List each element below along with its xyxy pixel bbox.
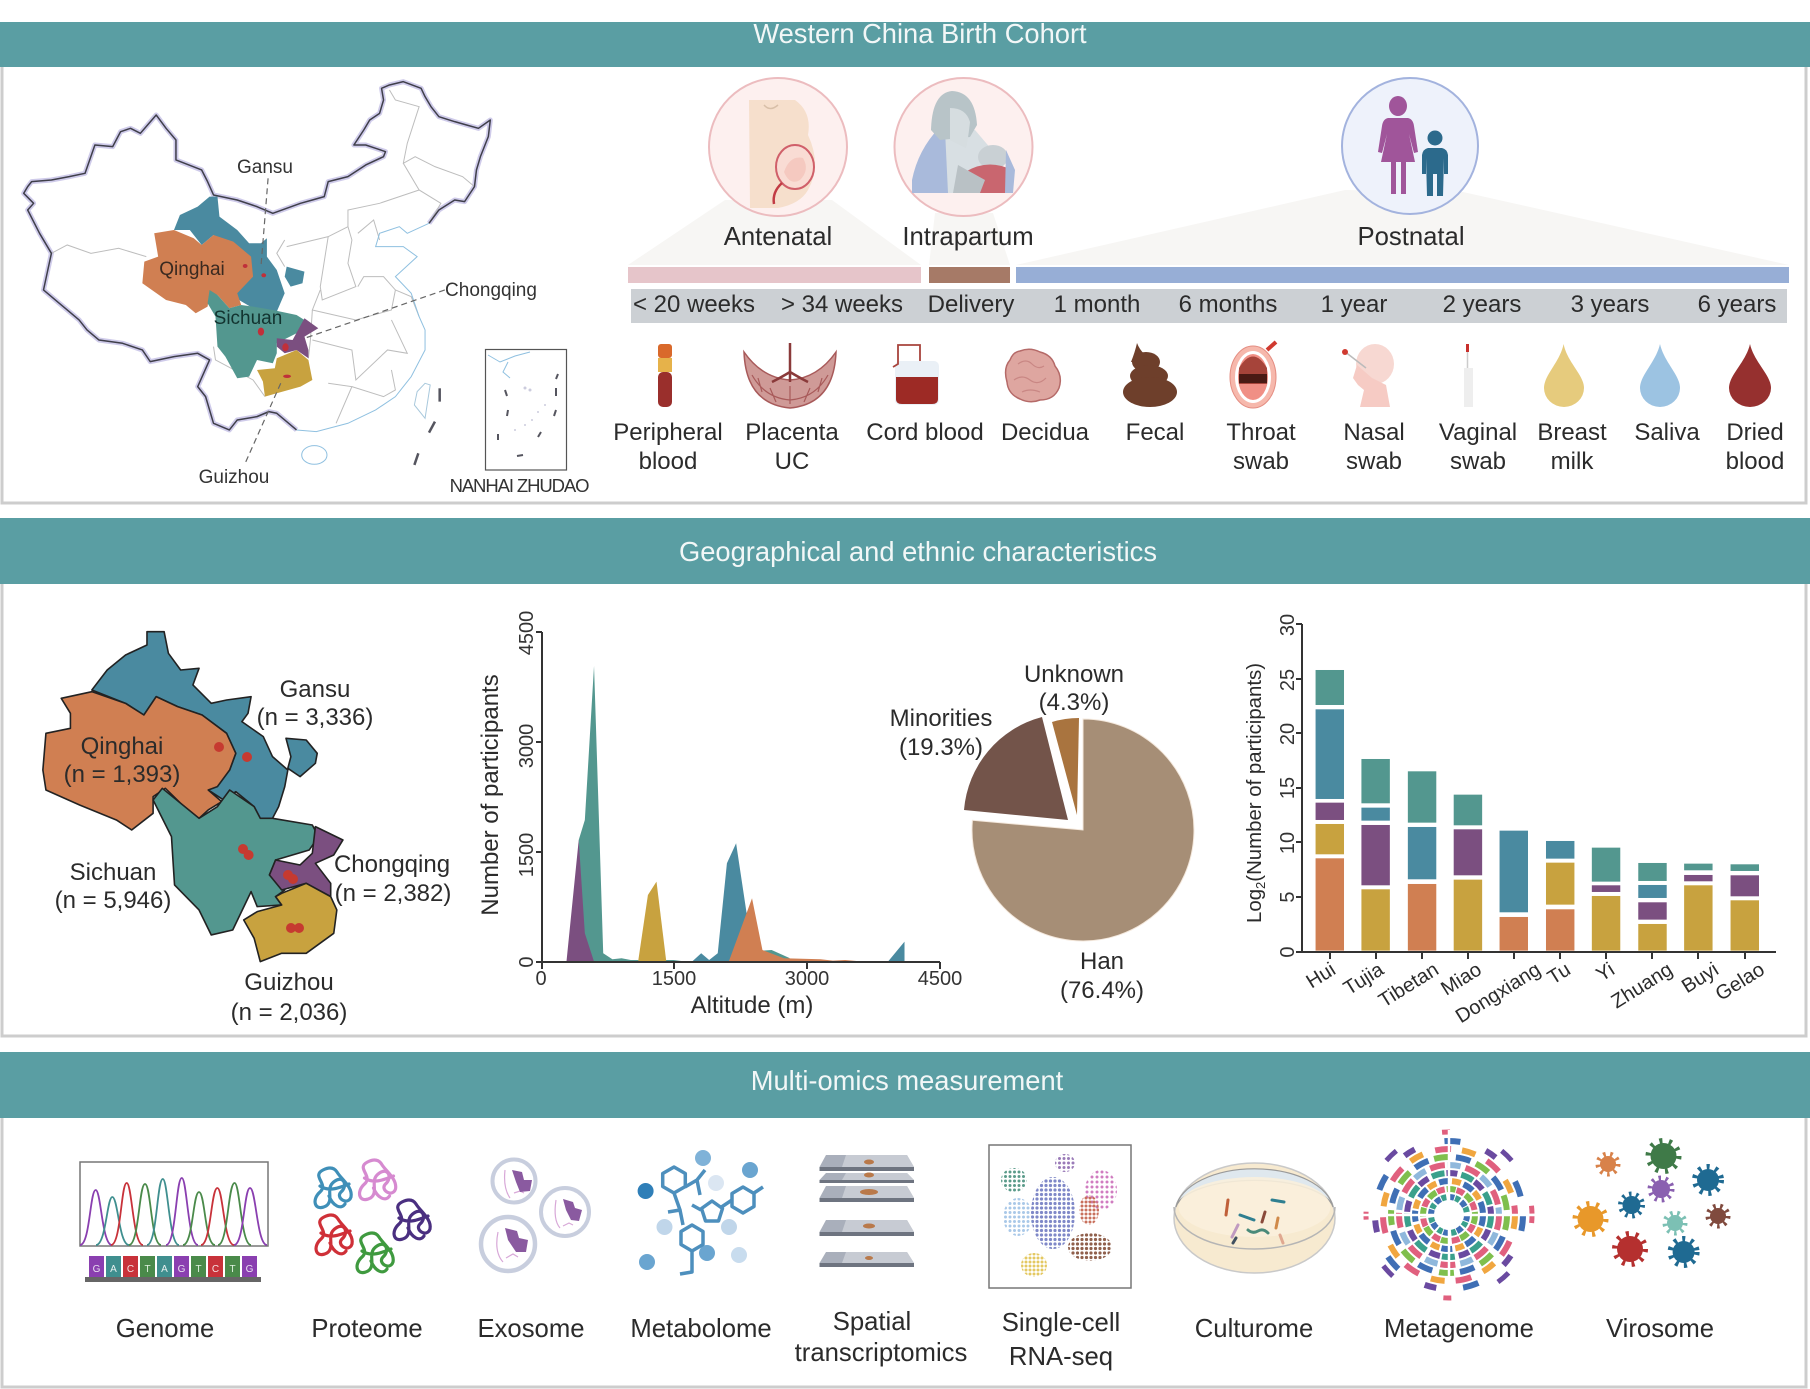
tick labels: 3000: [785, 968, 829, 990]
omics: metagenome: Metagenome: [1384, 1315, 1534, 1343]
omics: metabolome: [630, 1150, 772, 1343]
header bar 1: Western China Birth Cohort: [753, 18, 1087, 49]
tick labels: [516, 611, 962, 990]
sample: cord blood: [866, 345, 984, 446]
icon: pregnant abdomen: [749, 100, 815, 208]
icon: child figure: [1422, 130, 1448, 196]
sample: peripheral blood: Peripheral: [613, 419, 723, 446]
land border glow: [24, 82, 490, 430]
Guizhou region: [244, 883, 337, 962]
omics: single-cell RNA-seq: [989, 1145, 1131, 1371]
bar: Miao: [1454, 795, 1482, 951]
omics: metagenome: [1360, 1130, 1540, 1343]
Gansu on map: [174, 197, 304, 312]
tick labels: 1500: [516, 833, 538, 877]
timeline strip: [631, 289, 1787, 323]
bar chart axes: [1296, 624, 1776, 959]
timeline strip: < 20 weeks: [633, 291, 755, 318]
bar: Gelao: [1731, 864, 1759, 951]
region labels: Chongqing: [334, 851, 450, 878]
sample: vaginal swab: swab: [1450, 448, 1506, 475]
virus particles: [1576, 1141, 1728, 1265]
stacked bar chart: minorities: [1244, 614, 1776, 1028]
circular genome rings: [1366, 1132, 1532, 1298]
ethnic group labels: Yi: [1593, 959, 1619, 986]
icon: woman figure: [1378, 96, 1418, 194]
map labels: [159, 157, 537, 488]
regional map with sample sizes: [43, 632, 451, 1026]
sample: placenta UC: Placenta: [745, 419, 839, 446]
Gansu area: [692, 843, 905, 962]
sample: dried blood: Dried: [1726, 419, 1784, 446]
omics: single-cell RNA-seq: RNA-seq: [1009, 1343, 1113, 1371]
bar: Yi: [1592, 848, 1620, 951]
ethnic group labels: Zhuang: [1607, 959, 1677, 1013]
omics: spatial transcriptomics: transcriptomics: [795, 1339, 967, 1367]
pie labels: (19.3%): [899, 734, 983, 761]
vesicle 3: [481, 1217, 535, 1271]
map labels: Gansu: [237, 157, 293, 178]
stage: Postnatal: [1342, 78, 1478, 251]
Qinghai area: [762, 950, 790, 962]
connector fans: [628, 190, 1789, 265]
Gansu region: [92, 632, 317, 818]
sample: saliva: Saliva: [1634, 419, 1700, 446]
vesicle 1: [492, 1160, 536, 1202]
tick labels: 0: [516, 956, 538, 968]
Guizhou on map: [257, 350, 312, 397]
omics: metabolome: Metabolome: [630, 1315, 772, 1343]
sample: placenta UC: UC: [775, 448, 809, 475]
tick labels: 4500: [918, 968, 962, 990]
provincial boundaries: [51, 90, 474, 423]
section 1: Western China Birth Cohort: [0, 18, 1810, 503]
timeline strip: 6 years: [1698, 291, 1776, 318]
axis titles: Altitude (m): [691, 992, 813, 1019]
Chongqing area: [566, 840, 594, 962]
timeline colour bars: [628, 267, 1789, 283]
sample: peripheral blood: [613, 344, 723, 475]
base call letters: T: [195, 1264, 202, 1275]
ethnic group labels: Tujia: [1340, 958, 1388, 1000]
omics: exosome: [477, 1160, 589, 1343]
sample: nasal swab: swab: [1346, 448, 1402, 475]
pie labels: Han: [1080, 948, 1124, 975]
section 3: Multi-omics measurement: [0, 1052, 1810, 1387]
y tick labels: 20: [1277, 723, 1299, 745]
region labels: Sichuan: [70, 859, 156, 886]
sample: breast milk: Breast: [1537, 419, 1607, 446]
slice: Han: [972, 719, 1194, 941]
map labels: Qinghai: [159, 259, 225, 280]
sample: nasal swab: Nasal: [1343, 419, 1405, 446]
sample: throat swab: Throat: [1226, 419, 1296, 446]
ethnic group labels: [1303, 958, 1769, 1028]
Chongqing on map: [277, 318, 318, 358]
ethnic group labels: Hui: [1303, 959, 1340, 993]
timeline strip: 2 years: [1443, 291, 1521, 318]
base call letters: G: [178, 1264, 186, 1275]
y tick labels: 10: [1277, 832, 1299, 854]
region labels: (n = 3,336): [257, 704, 373, 731]
Hainan and Taiwan: [302, 383, 430, 464]
base call letters: A: [161, 1264, 168, 1275]
omics: exosome: Exosome: [477, 1315, 585, 1343]
China map: [24, 82, 537, 488]
tick labels: 4500: [516, 611, 538, 655]
tick labels: 0: [535, 968, 547, 990]
bar: Dongxiang: [1500, 831, 1528, 951]
base call letters: G: [93, 1264, 101, 1275]
sample: placenta UC: [744, 343, 839, 475]
omics: spatial transcriptomics: [795, 1155, 967, 1367]
stage: Antenatal: [709, 78, 847, 251]
header bar 1: [0, 18, 1810, 67]
sample: breast milk: milk: [1551, 448, 1594, 475]
ethnic group labels: Tibetan: [1375, 959, 1443, 1012]
pie labels: [890, 661, 1144, 1004]
y tick labels: 15: [1277, 777, 1299, 799]
protein tangles: [315, 1160, 430, 1273]
pie labels: (4.3%): [1039, 689, 1109, 716]
timeline strip: 1 year: [1321, 291, 1387, 318]
omics: genome: Genome: [116, 1315, 214, 1343]
base call letters: C: [127, 1264, 134, 1275]
map labels: Sichuan: [214, 308, 282, 329]
axis titles: Number of participants: [477, 674, 504, 916]
sample: cord blood: Cord blood: [866, 419, 984, 446]
sample: nasal swab: [1342, 344, 1405, 475]
tick labels: 1500: [652, 968, 696, 990]
header bar 3: Multi-omics measurement: [751, 1065, 1064, 1096]
y tick labels: 25: [1277, 669, 1299, 691]
region labels: (n = 5,946): [55, 887, 171, 914]
base call letters: A: [110, 1264, 117, 1275]
sample: decidua: [1001, 349, 1090, 446]
region labels: (n = 2,382): [335, 880, 451, 907]
Guizhou area: [638, 882, 666, 962]
site markers: [214, 742, 304, 933]
leader lines: [245, 178, 445, 463]
bar: Tibetan: [1408, 771, 1436, 951]
black land border: [24, 82, 490, 430]
sample: dried blood: [1726, 344, 1784, 475]
panel 1 frame: [2, 60, 1806, 503]
pie labels: Unknown: [1024, 661, 1124, 688]
ethnic group labels: Miao: [1437, 959, 1486, 1000]
y tick labels: 30: [1277, 614, 1299, 636]
y axis title: Log: [1244, 889, 1266, 923]
island dashes: [414, 388, 440, 465]
chromatogram peaks: [80, 1178, 267, 1245]
y tick labels: 0: [1277, 946, 1299, 958]
area chart: participants by altitude: [477, 611, 962, 1019]
inset: Nanhai Zhudao: NANHAI ZHUDAO: [450, 475, 589, 496]
omics: proteome: [311, 1160, 430, 1343]
timeline strip: > 34 weeks: [781, 291, 903, 318]
sample: saliva: [1634, 344, 1700, 446]
y tick labels: 5: [1277, 891, 1299, 903]
bar: Zhuang: [1638, 863, 1667, 951]
Sichuan region: [153, 788, 318, 935]
metabolite dots: [638, 1150, 758, 1270]
base call letters: C: [212, 1264, 219, 1275]
petri dish: [1174, 1163, 1335, 1273]
base call letters: G: [246, 1264, 254, 1275]
bar: Hui: [1316, 670, 1344, 951]
sample: throat swab: swab: [1233, 448, 1289, 475]
omics: culturome: [1174, 1163, 1335, 1343]
sample: decidua: Decidua: [1001, 419, 1090, 446]
map labels: Chongqing: [445, 280, 537, 301]
base call letters: T: [229, 1264, 236, 1275]
omics: spatial transcriptomics: Spatial: [833, 1308, 911, 1336]
slice: Minorities: [964, 717, 1068, 820]
timeline strip: 6 months: [1179, 291, 1277, 318]
vesicle 2: [541, 1188, 589, 1236]
omics: virosome: [1576, 1141, 1728, 1343]
y tick labels: [1277, 614, 1299, 958]
bacteria: [1226, 1200, 1284, 1243]
stage: Intrapartum: [894, 78, 1034, 251]
header bar 2: Geographical and ethnic characteristics: [679, 536, 1157, 567]
bar: Tujia: [1361, 759, 1390, 951]
axes: [536, 632, 940, 969]
Chongqing region: [269, 827, 343, 897]
omics: single-cell RNA-seq: Single-cell: [1002, 1309, 1120, 1337]
ethnic group labels: Dongxiang: [1452, 959, 1545, 1028]
pie labels: (76.4%): [1060, 977, 1144, 1004]
panel 2 frame: [2, 570, 1806, 1036]
map fill: [24, 82, 490, 432]
Sichuan area: [576, 666, 686, 962]
base call letters: [89, 1256, 257, 1277]
sample: fecal: Fecal: [1126, 419, 1184, 446]
tissue slides: [820, 1155, 914, 1267]
sample: peripheral blood: blood: [639, 448, 697, 475]
tick labels: 3000: [516, 724, 538, 768]
region labels: (n = 2,036): [231, 999, 347, 1026]
axis titles: [477, 674, 813, 1019]
tSNE clusters: [1001, 1154, 1117, 1277]
stage: Intrapartum: Intrapartum: [902, 223, 1034, 251]
header bar 2: [0, 518, 1810, 584]
region labels: Guizhou: [244, 969, 334, 996]
omics: proteome: Proteome: [311, 1315, 423, 1343]
omics: virosome: Virosome: [1606, 1315, 1714, 1343]
sample: breast milk: [1537, 344, 1607, 475]
region labels: (n = 1,393): [64, 761, 180, 788]
stage: Antenatal: Antenatal: [724, 223, 832, 251]
region labels: Qinghai: [81, 733, 163, 760]
panel 3 frame: [2, 1100, 1806, 1387]
sampling sites on map: [243, 264, 291, 378]
timeline strip: 1 month: [1054, 291, 1140, 318]
ethnic group labels: Gelao: [1712, 959, 1769, 1006]
sample: fecal: [1123, 343, 1184, 446]
ethnic group labels: Tu: [1544, 959, 1575, 989]
sample: vaginal swab: Vaginal: [1439, 419, 1517, 446]
slice: Unknown: [1052, 718, 1079, 815]
Qinghai region: [43, 692, 236, 830]
molecular structures: [663, 1167, 763, 1274]
inset: Nanhai Zhudao: [450, 350, 589, 496]
y axis title: 2: [1253, 882, 1268, 889]
coastline: [297, 223, 429, 432]
ethnic group labels: Buyi: [1678, 959, 1723, 998]
pie chart: ethnic composition: [890, 661, 1194, 1004]
pie labels: Minorities: [890, 705, 992, 732]
bar: Buyi: [1684, 864, 1713, 951]
icon: mother and baby: [912, 91, 1015, 193]
y axis title: (Number of participants): [1244, 663, 1266, 882]
omics: culturome: Culturome: [1195, 1315, 1313, 1343]
section 2: Geographical and ethnic characteristics: [0, 518, 1810, 1036]
header bar 3: [0, 1052, 1810, 1118]
sample: throat swab: [1226, 342, 1296, 475]
stage: Postnatal: Postnatal: [1357, 223, 1465, 251]
sample: dried blood: blood: [1726, 448, 1784, 475]
Qinghai on map: [142, 230, 253, 313]
map labels: Guizhou: [199, 467, 269, 488]
sample: vaginal swab: [1439, 344, 1517, 475]
omics: genome: [80, 1162, 268, 1343]
region labels: Gansu: [280, 676, 350, 703]
bar: Tu: [1546, 841, 1574, 951]
timeline strip: Delivery: [928, 291, 1014, 318]
Sichuan on map: [208, 290, 304, 378]
region labels: [55, 676, 451, 1026]
base call letters: T: [144, 1264, 151, 1275]
timeline strip: 3 years: [1571, 291, 1649, 318]
